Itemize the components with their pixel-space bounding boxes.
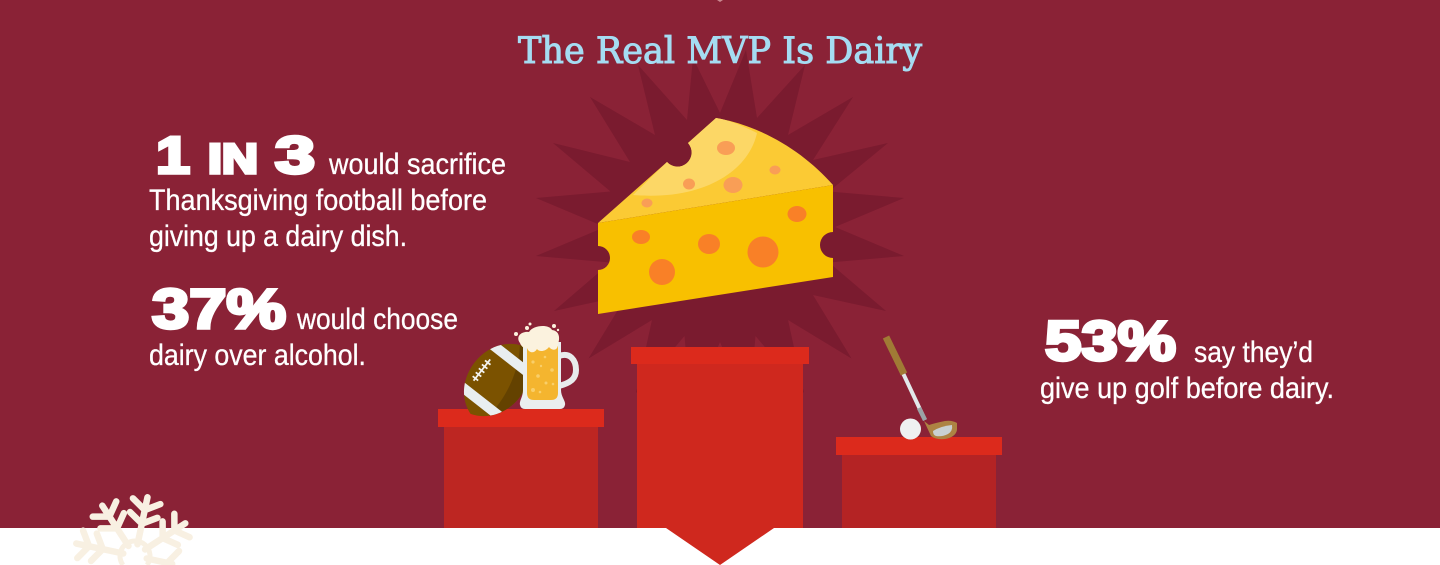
mug handle: [559, 355, 576, 386]
stat: 53%: say they’d: [1194, 336, 1313, 369]
title: The Real MVP Is Dairy: [518, 31, 923, 72]
cheese front face: [598, 185, 833, 314]
cheese wedge: [598, 118, 833, 314]
icon: golf club and ball: [886, 337, 957, 440]
stat: 1 in 3: giving up a dairy dish.: [149, 220, 407, 253]
stat: 53%: [1040, 309, 1334, 405]
club grip: [886, 337, 904, 374]
stat: 53%: 53%: [1045, 309, 1176, 372]
foam: [518, 326, 559, 352]
club head: [924, 421, 957, 439]
icon: beer mug: [514, 322, 576, 409]
starburst behind cheese: [536, 50, 904, 411]
icon: snowflake: [73, 494, 193, 565]
left podium: [438, 409, 604, 528]
stat: 37%: dairy over alcohol.: [149, 339, 366, 372]
club shaft: [902, 371, 925, 420]
golf ball: [900, 418, 921, 440]
club face: [933, 425, 952, 436]
stat: 1 in 3: [149, 127, 506, 253]
beer bubbles: [531, 356, 554, 393]
stat: 1 in 3: Thanksgiving football before: [149, 184, 487, 217]
stat: 37%: [149, 277, 458, 372]
cheese holes: [632, 206, 806, 285]
stat: 1 in 3: would sacrifice: [328, 148, 506, 181]
stat: 1 in 3: 3: [275, 127, 315, 185]
stat: 1 in 3: IN: [208, 135, 258, 182]
stat: 37%: 37%: [152, 277, 286, 340]
club hosel: [919, 408, 925, 420]
beer: [527, 346, 558, 400]
foam bubbles: [514, 322, 559, 336]
cheese top highlight: [633, 118, 757, 196]
icon: football: [464, 344, 523, 416]
stat: 1 in 3: 1: [156, 127, 190, 185]
center podium with arrow: [631, 347, 809, 565]
mug glass: [520, 342, 565, 409]
cheese top holes: [642, 141, 780, 208]
stat: 37%: would choose: [296, 303, 458, 336]
stat: 53%: give up golf before dairy.: [1040, 372, 1334, 405]
cheese top face: [598, 118, 833, 223]
right podium: [836, 437, 1002, 528]
